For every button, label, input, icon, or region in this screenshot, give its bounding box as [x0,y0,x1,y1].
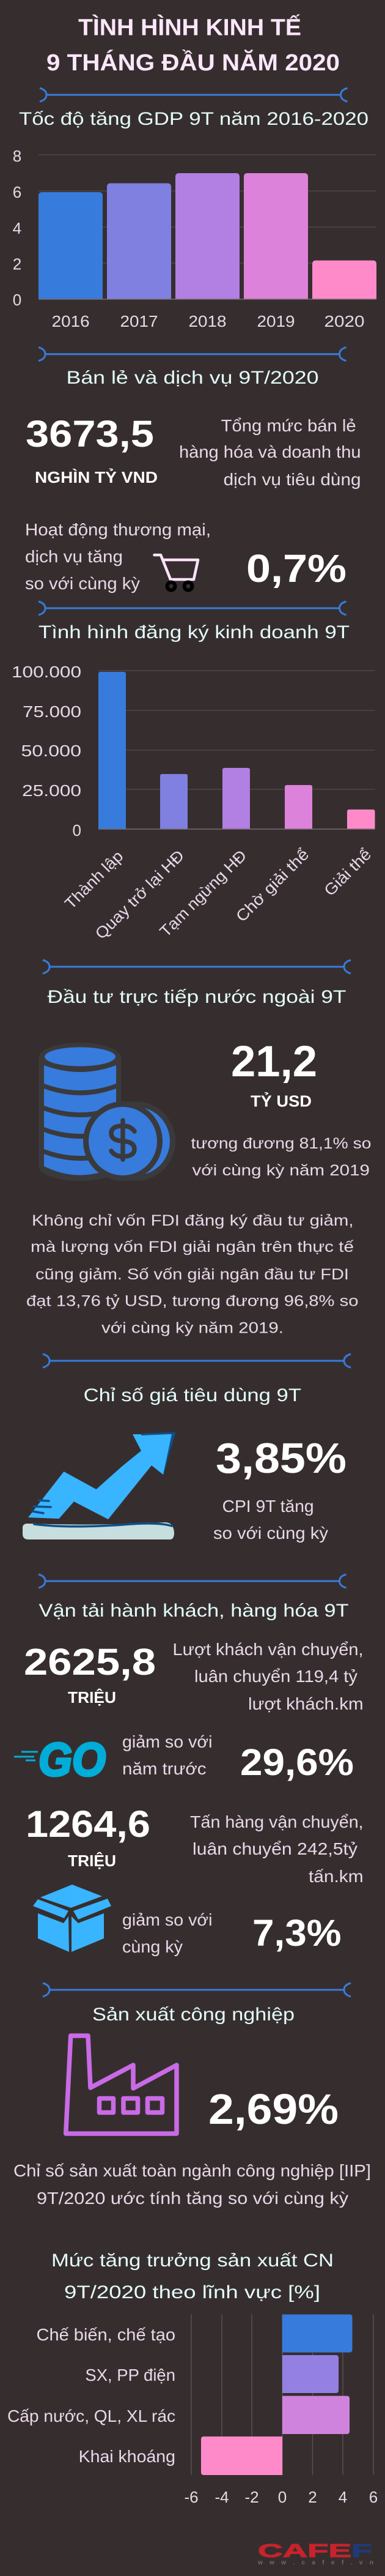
stat: passengers [24,1641,156,1707]
text block: freight: luân chuyển 242,5tỷ [193,1839,358,1858]
heading: business registration: Tình hình đăng ký kinh doanh 9T [38,622,350,642]
text block: retail description: dịch vụ tiêu dùng [224,470,361,489]
text block: passengers decline: giảm so với [122,1732,213,1751]
icon: GO logo: GO [38,1734,106,1786]
text block: freight decline: cùng kỳ [122,1937,183,1956]
title [46,13,340,76]
heading: industry by sector: 9T/2020 theo lĩnh vực [%] [64,2282,320,2302]
bar chart: business registration: 25.000 [22,781,81,800]
bar chart: business registration: Giải thể [320,845,375,899]
text block: industry: 9T/2020 ước tính tăng so với cùng kỳ [37,2189,348,2208]
stat: freight: 1264,6 [26,1803,150,1845]
stat: industry: 2,69% [208,2085,339,2133]
text block: FDI comparison: với cùng kỳ năm 2019 [192,1162,370,1179]
bar chart: GDP growth: 4 [13,219,21,237]
bar chart: GDP growth: 0 [13,291,21,309]
bar chart: industry by sector: Cấp nước, QL, XL rác [7,2407,175,2425]
bar chart: GDP growth: 6 [13,183,21,201]
text block: freight decline: giảm so với [122,1910,213,1929]
text block: FDI paragraph: Không chỉ vốn FDI đăng ký đầu tư giảm, [32,1212,353,1229]
text block: FDI comparison: tương đương 81,1% so [191,1135,372,1152]
bar chart: business registration [12,663,375,943]
bar chart: GDP growth [13,147,376,330]
stat: CPI: 3,85% [216,1434,346,1482]
stat: trade growth: 0,7% [246,546,346,590]
text block: industry [13,2161,371,2208]
icon: GO logo [14,1734,106,1786]
bar chart: GDP growth: 2018 [188,312,226,330]
bar chart: GDP growth: 2 [13,255,21,273]
icon: box [33,1885,111,1952]
bar chart: industry by sector [7,2314,378,2506]
text block: passengers: lượt khách.km [248,1694,364,1713]
bar chart: industry by sector: -6 [184,2488,199,2506]
text block: passengers: Lượt khách vận chuyển, [172,1640,363,1659]
bar chart: GDP growth: 2019 [257,312,295,330]
stat: FDI [231,1038,317,1110]
text block: FDI paragraph: với cùng kỳ năm 2019. [101,1319,284,1336]
text block: retail description: hàng hóa và doanh thu [179,442,361,461]
stat: passengers: TRIỆU [68,1688,116,1707]
bar chart: business registration: Thành lập [61,847,127,913]
text block: trade services: so với cùng kỳ [25,574,140,593]
stat: passengers decline: 29,6% [240,1741,354,1783]
bar chart: business registration: 100.000 [12,663,81,681]
bar chart: industry by sector: 4 [339,2488,347,2506]
stat: FDI: 21,2 [231,1038,317,1086]
text block: FDI paragraph [26,1212,358,1336]
bar chart: business registration: Chờ giải thể [232,845,312,926]
logo: CafeF: CAFE [258,2540,351,2561]
stat: freight [26,1803,150,1870]
text block: passengers: luân chuyển 119,4 tỷ [194,1667,358,1686]
heading: GDP: Tốc độ tăng GDP 9T năm 2016-2020 [19,109,369,129]
heading: industry by sector: Mức tăng trưởng sản xuất CN [51,2250,334,2271]
icon: coin stack with dollar [39,1043,175,1181]
logo: CafeF: F [351,2540,372,2561]
stat: freight decline: 7,3% [252,1912,341,1954]
title: 9 THÁNG ĐẦU NĂM 2020 [46,49,340,76]
stat: retail total [26,413,158,486]
bar chart: industry by sector: 6 [369,2488,378,2506]
text block: FDI paragraph: mà lượng vốn FDI giải ngân trên thực tế [31,1238,354,1256]
text block: freight: Tấn hàng vận chuyển, [190,1812,364,1831]
text block: retail description: Tổng mức bán lẻ [221,416,356,435]
heading: industry by sector [51,2250,334,2302]
heading: industry: Sản xuất công nghiệp [92,2005,295,2025]
logo: CafeF: www.cafef.vn [257,2559,373,2566]
text block: freight: tấn.km [309,1867,364,1886]
stat: retail total: NGHÌN TỶ VND [35,468,158,486]
bar chart: business registration: Tạm ngừng HĐ [156,846,250,940]
bar chart: business registration: Quay trở lại HĐ [92,846,188,943]
bar chart: business registration: 0 [73,821,81,839]
stat: passengers: 2625,8 [24,1641,156,1683]
bar chart: industry by sector: Khai khoáng [79,2447,175,2466]
text block: FDI paragraph: đạt 13,76 tỷ USD, tương đương 96,8% so [26,1292,358,1309]
heading: transport: Vận tải hành khách, hàng hóa 9T [39,1601,348,1621]
heading: retail: Bán lẻ và dịch vụ 9T/2020 [66,368,319,388]
title: TÌNH HÌNH KINH TẾ [78,13,301,40]
text block: CPI [213,1497,328,1543]
heading: CPI: Chỉ số giá tiêu dùng 9T [84,1385,301,1405]
stat: retail total: 3673,5 [26,413,154,455]
text block: industry: Chỉ số sản xuất toàn ngành công nghiệp [IIP] [13,2161,371,2180]
text block: retail description [179,416,361,489]
icon: shopping cart [154,555,198,592]
text block: FDI comparison [191,1135,372,1179]
text block: CPI: so với cùng kỳ [213,1524,328,1543]
text block: passengers decline [122,1732,213,1778]
bar chart: business registration: 50.000 [21,742,81,760]
text block: freight decline [122,1910,213,1956]
bar chart: GDP growth: 2020 [324,312,364,330]
bar chart: GDP growth: 2016 [52,312,90,330]
bar chart: GDP growth: 8 [13,147,21,165]
text block: freight [190,1812,364,1886]
icon: factory [66,2036,177,2134]
heading: FDI: Đầu tư trực tiếp nước ngoài 9T [48,987,346,1007]
text block: trade services: Hoạt động thương mại, [25,520,211,539]
bar chart: industry by sector: 0 [278,2488,287,2506]
bar chart: industry by sector: Chế biến, chế tạo [37,2325,175,2344]
text block: trade services [25,520,211,593]
bar chart: GDP growth: 2017 [120,312,158,330]
bar chart: industry by sector: 2 [308,2488,317,2506]
bar chart: business registration: 75.000 [23,702,81,721]
stat: freight: TRIỆU [68,1852,116,1870]
text block: trade services: dịch vụ tăng [25,547,123,566]
bar chart: industry by sector: SX, PP điện [85,2366,175,2384]
text block: FDI paragraph: cũng giảm. Số vốn giải ngân đầu tư FDI [35,1266,349,1283]
text block: passengers decline: năm trước [122,1759,207,1778]
bar chart: industry by sector: -2 [244,2488,259,2506]
stat: FDI: TỶ USD [251,1092,312,1110]
icon: rising arrow [23,1433,175,1539]
text block: CPI: CPI 9T tăng [222,1497,314,1516]
bar chart: industry by sector: -4 [215,2488,229,2506]
text block: passengers [172,1640,364,1713]
logo: CafeF [257,2540,373,2566]
